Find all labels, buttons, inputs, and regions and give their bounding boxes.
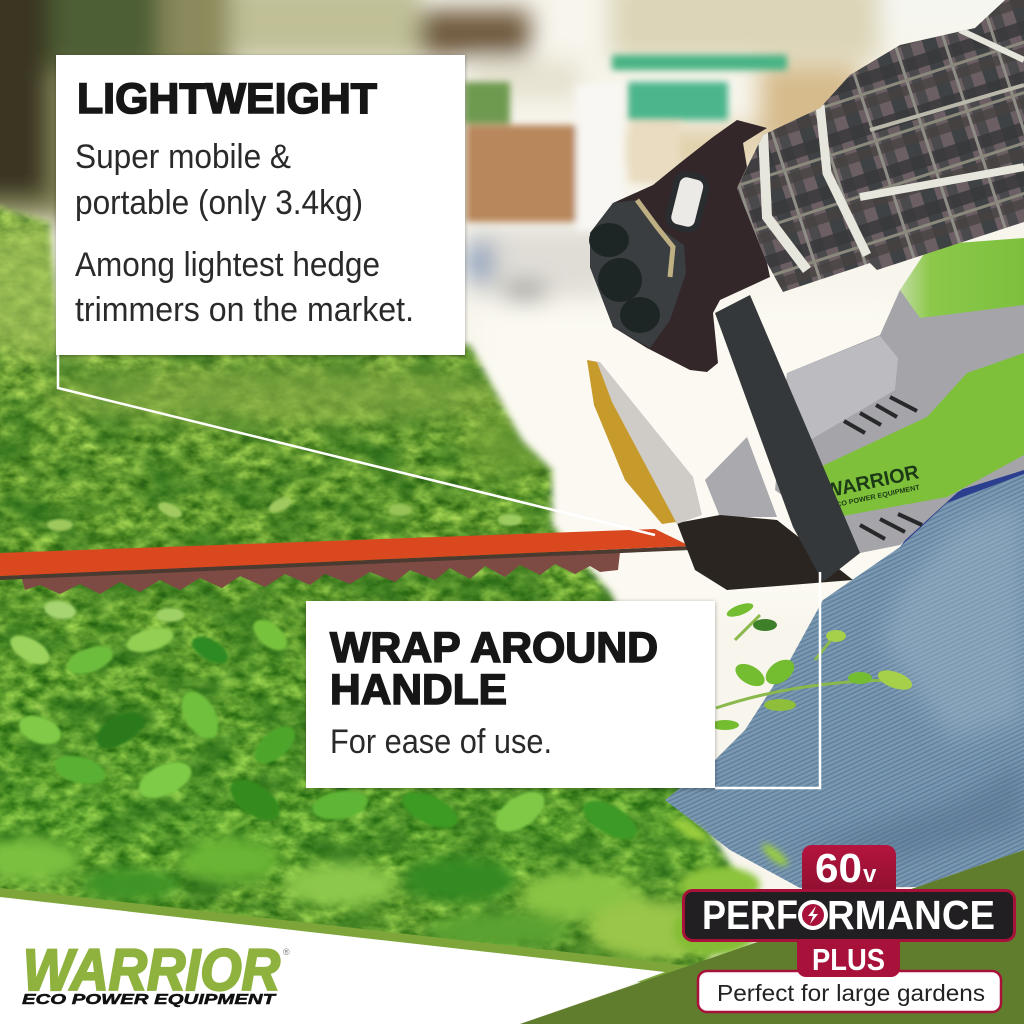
green side panel [820,353,1024,517]
60v tab: 60 [815,845,862,891]
green cap [900,238,1024,318]
performance bar: PERF [702,892,798,938]
nose [705,437,777,517]
bottom footer wedge [0,850,1024,1024]
glove [589,120,770,372]
leaf sprig [711,601,915,730]
heading: lightweight: LIGHTWEIGHT [77,75,377,123]
hedge trimmer [0,238,1024,594]
shirt sleeve [720,0,1024,300]
cutting blade [0,529,690,594]
jeans [665,453,1024,888]
60v tab: v [863,861,877,888]
body highlight [787,336,898,440]
heading: wrap around handle [330,624,658,714]
perfect for large gardens pill: Perfect for large gardens [717,980,985,1006]
badge: 60v performance plus [684,845,1014,1012]
body text: lightweight: portable (only 3.4kg) [75,184,363,222]
body text: lightweight: trimmers on the market. [75,291,414,329]
60v tab [802,845,896,892]
body text: lightweight: Super mobile & [75,138,291,176]
performance bar: RMANCE [827,892,995,938]
body logo: WARRIOR [822,461,921,503]
leader line: lightweight [58,355,655,535]
body text: lightweight [75,138,414,329]
performance bar: O [799,892,828,938]
foreground leaves near jeans [668,814,790,956]
panel: wrap around handle [306,601,715,788]
leader line: wrap around handle [715,572,820,788]
heading: wrap around handle: HANDLE [330,666,507,714]
grey body [775,270,1024,553]
logo: warrior: WARRIOR [23,938,280,1003]
body text: wrap around handle: For ease of use. [330,723,552,761]
body logo: ECO POWER EQUIPMENT [831,484,921,510]
perfect for large gardens pill [698,971,1001,1012]
panel: lightweight [56,55,465,355]
performance bar [684,890,1014,940]
icon: lightning bolt [798,900,828,930]
hedge foliage [0,180,780,990]
body text: lightweight: Among lightest hedge [75,246,380,284]
gearbox [677,515,853,590]
handle [715,295,860,582]
logo: warrior: ECO POWER EQUIPMENT [22,991,277,1008]
logo: warrior: ® [283,947,290,957]
blade guard [587,360,702,524]
vents [844,397,922,539]
plus tab: PLUS [812,942,885,977]
heading: wrap around handle: WRAP AROUND [330,624,658,672]
